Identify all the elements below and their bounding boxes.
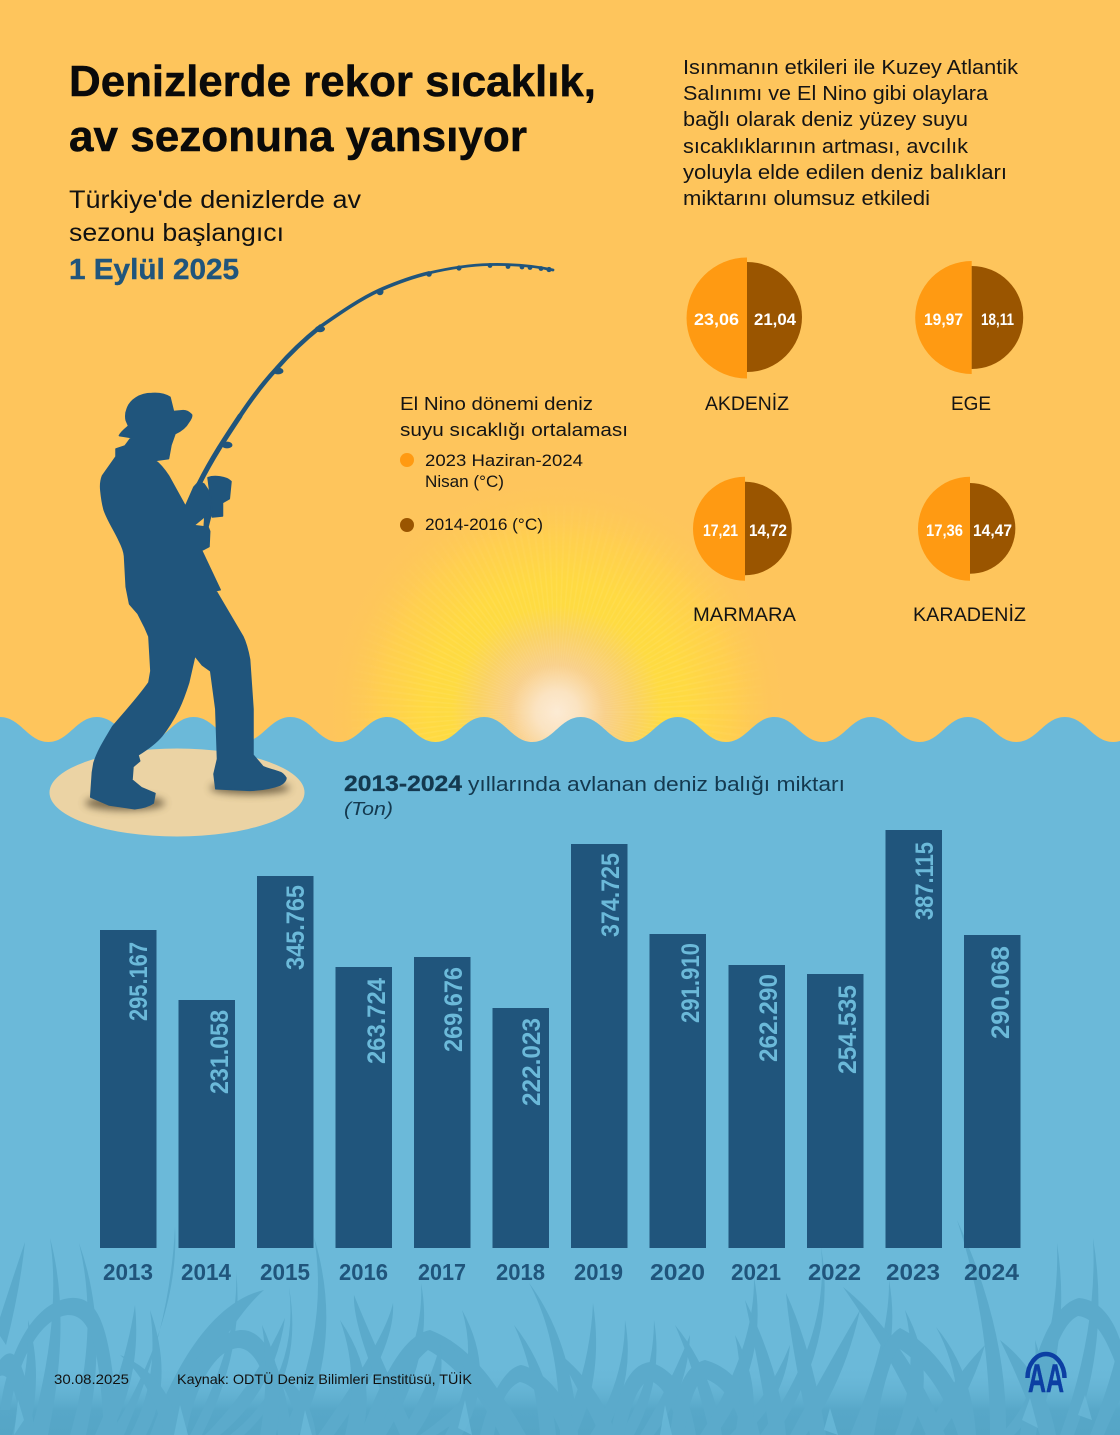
bar values: 295.167	[125, 942, 153, 1021]
gap between hands	[196, 518, 204, 526]
year labels: 2015	[260, 1259, 310, 1285]
year labels: 2020	[650, 1259, 705, 1285]
intro paragraph: sıcaklıklarının artması, avcılık	[683, 135, 969, 158]
bar values: 387.115	[911, 842, 939, 920]
year labels: 2022	[808, 1259, 861, 1285]
seabed depth shading	[0, 1365, 1120, 1435]
bar values: 269.676	[440, 967, 468, 1052]
intro paragraph: Isınmanın etkileri ile Kuzey Atlantik	[683, 56, 1019, 79]
semi-circle chart: Ege: 18,11	[981, 310, 1014, 329]
icon: AA logo: AA	[1028, 1357, 1064, 1401]
year labels: 2021	[731, 1259, 781, 1285]
sky background	[0, 0, 1120, 760]
subtitle	[69, 186, 362, 247]
semi-circle chart: Ege	[915, 261, 1023, 415]
bar chart	[100, 830, 1020, 1285]
bar values: 254.535	[834, 985, 862, 1074]
year labels	[103, 1259, 1019, 1285]
sun glow	[366, 524, 746, 742]
semi-circle chart: Marmara: 14,72	[749, 521, 787, 540]
bar values: 262.290	[755, 974, 783, 1062]
season start date: 1 Eylül 2025	[69, 254, 239, 286]
bar values: 345.765	[282, 885, 310, 970]
bar values: 231.058	[206, 1010, 234, 1094]
semi-circle chart: Karadeniz	[913, 477, 1026, 626]
title: Denizlerde rekor sıcaklık,	[69, 57, 596, 106]
year labels: 2013	[103, 1259, 153, 1285]
semi-circle chart: Akdeniz: 23,06	[694, 310, 739, 329]
chart heading	[344, 771, 845, 819]
semi-circle chart: Ege: EGE	[951, 394, 991, 415]
semi-circle chart: Marmara	[693, 477, 796, 626]
icon: AA logo	[1028, 1354, 1064, 1401]
semi-circle chart: Marmara: 17,21	[703, 521, 738, 540]
intro paragraph: Salınımı ve El Nino gibi olaylara	[683, 82, 989, 105]
year labels: 2014	[181, 1259, 231, 1285]
semi-circle chart: Akdeniz	[687, 258, 802, 415]
year labels: 2016	[339, 1259, 388, 1285]
legend: El Nino sea temperature	[400, 394, 628, 534]
legend item 2023-2024	[400, 451, 583, 491]
bar values: 374.725	[597, 853, 625, 937]
semi-circle chart: Akdeniz: 21,04	[754, 310, 797, 329]
semi-circle chart: Karadeniz: 17,36	[926, 521, 963, 540]
subtitle: Türkiye'de denizlerde av	[69, 186, 362, 214]
legend title: suyu sıcaklığı ortalaması	[400, 420, 628, 440]
sea with waves	[0, 717, 1120, 1435]
date: 30.08.2025	[54, 1371, 129, 1387]
title: av sezonuna yansıyor	[69, 112, 527, 161]
title	[69, 57, 596, 161]
fishing rod	[199, 263, 553, 484]
seagrass	[0, 1220, 1120, 1435]
bar values: 222.023	[518, 1018, 546, 1106]
intro paragraph	[683, 56, 1019, 210]
intro paragraph: bağlı olarak deniz yüzey suyu	[683, 108, 968, 131]
year labels: 2017	[418, 1259, 466, 1285]
year labels: 2023	[886, 1259, 940, 1285]
bar values	[125, 842, 1015, 1106]
year labels: 2019	[574, 1259, 623, 1285]
intro paragraph: miktarını olumsuz etkiledi	[683, 187, 930, 210]
chart heading: 2013-2024	[344, 771, 463, 796]
bar values: 290.068	[987, 946, 1015, 1039]
semi-circle chart: Ege: 19,97	[924, 310, 963, 329]
subtitle: sezonu başlangıcı	[69, 219, 284, 247]
legend title	[400, 394, 628, 440]
legend title: El Nino dönemi deniz	[400, 394, 593, 414]
semi-circle chart: Akdeniz: AKDENİZ	[705, 394, 789, 415]
year labels: 2018	[496, 1259, 545, 1285]
legend item 2023-2024: Nisan (°C)	[425, 472, 504, 491]
semi-circle chart: Marmara: MARMARA	[693, 605, 796, 626]
chart heading: (Ton)	[344, 799, 393, 819]
legend item 2014-2016: 2014-2016 (°C)	[425, 515, 543, 534]
bar values: 263.724	[363, 978, 391, 1064]
bar values: 291.910	[677, 943, 705, 1023]
fisherman silhouette	[91, 393, 286, 809]
foot shadows	[85, 782, 290, 810]
semi-circle chart: Karadeniz: KARADENİZ	[913, 605, 1026, 626]
chart heading: yıllarında avlanan deniz balığı miktarı	[468, 773, 845, 796]
sand island	[50, 748, 304, 836]
source: Kaynak: ODTÜ Deniz Bilimleri Enstitüsü, TÜİK	[177, 1370, 473, 1387]
bars	[100, 830, 1020, 1248]
semi-circle chart: Karadeniz: 14,47	[973, 521, 1012, 540]
year labels: 2024	[964, 1259, 1019, 1285]
legend item 2023-2024: 2023 Haziran-2024	[425, 451, 583, 470]
intro paragraph: yoluyla elde edilen deniz balıkları	[683, 161, 1007, 184]
seabed light gaps	[14, 1395, 1092, 1435]
